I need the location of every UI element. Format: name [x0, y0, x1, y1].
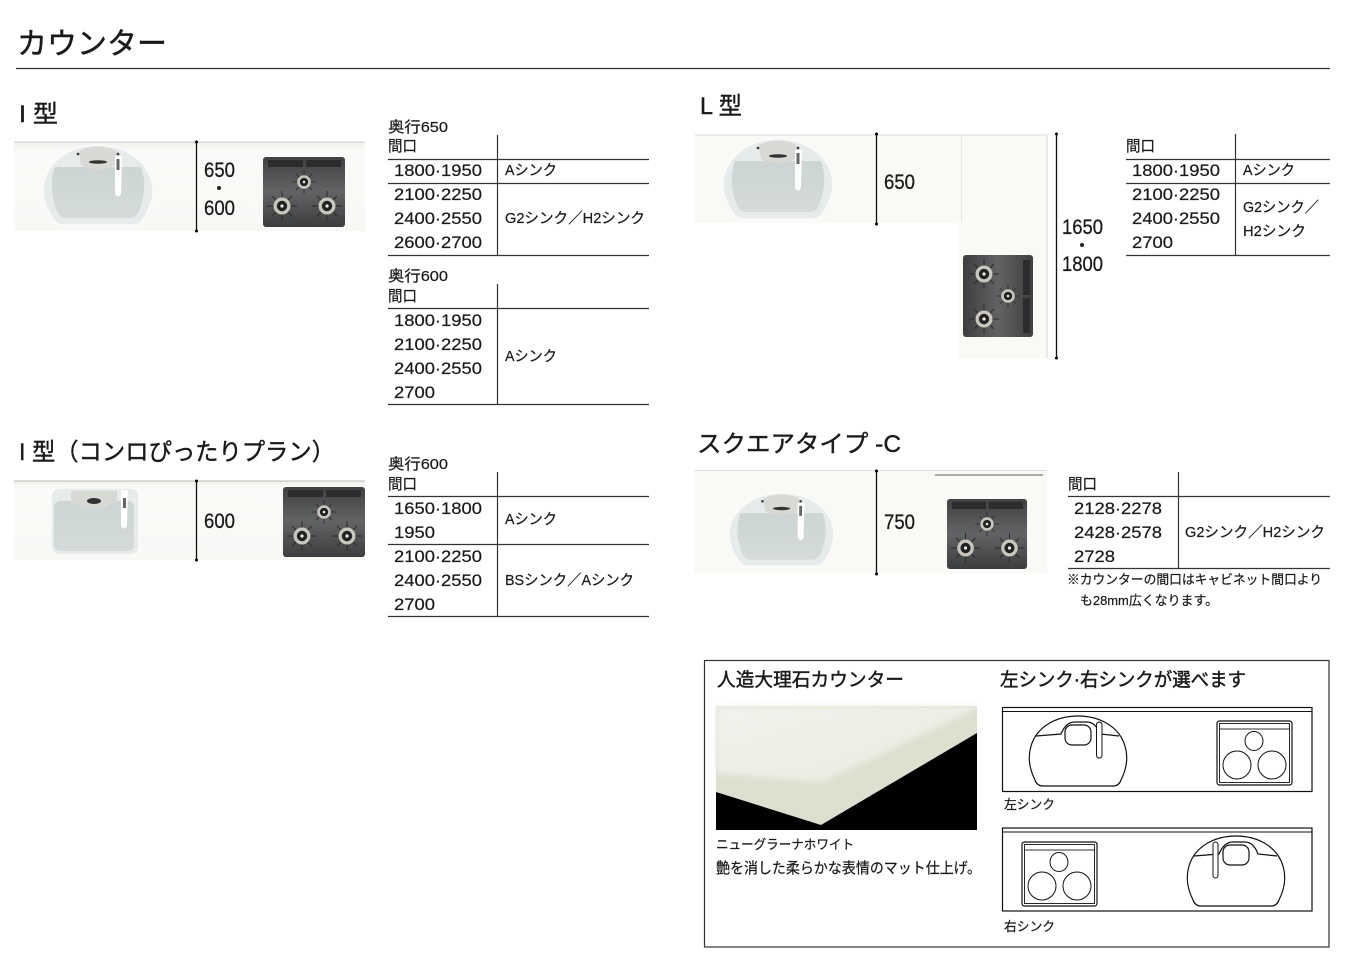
page title: カウンター	[17, 28, 167, 61]
table: 奥行650: G2シンク／H2シンク	[505, 210, 645, 227]
table: 奥行600: 2400·2550	[394, 359, 482, 378]
table: 奥行650: 奥行650	[388, 119, 448, 136]
material photo	[716, 706, 977, 830]
table: 奥行600 プラン: Aシンク	[505, 511, 557, 528]
dimension: 750: 750	[884, 511, 915, 534]
material caption: ニューグラーナホワイト	[716, 837, 854, 852]
table: 奥行600 プラン: 2700	[394, 595, 435, 614]
counter photo: I型	[14, 142, 365, 231]
table: 奥行600 プラン: 2100·2250	[394, 547, 482, 566]
table: 奥行600: 間口	[388, 288, 417, 305]
table: 奥行600: 2700	[394, 383, 435, 402]
table: 奥行650: 2100·2250	[394, 185, 482, 204]
table: 奥行600 プラン: 間口	[388, 476, 417, 493]
table: スクエア 間口	[1068, 472, 1330, 568]
table: L型 間口: 2400·2550	[1132, 209, 1220, 228]
dimension: 600	[195, 480, 235, 562]
counter photo: スクエアタイプ-C	[694, 470, 1047, 573]
table: L型 間口: Aシンク	[1243, 162, 1295, 179]
table: 奥行600: 奥行600	[388, 268, 448, 285]
table: 奥行650	[388, 119, 649, 256]
table: 奥行600: Aシンク	[505, 348, 557, 365]
table: 奥行600 プラン: 奥行600	[388, 456, 448, 473]
diagram: 右シンク	[1002, 828, 1312, 934]
diagram: 左シンク	[1002, 708, 1312, 812]
section: スクエアタイプ-C	[694, 431, 1330, 608]
table: スクエア 間口: 2128·2278	[1074, 499, 1162, 518]
footnote	[1067, 572, 1322, 608]
dimension: 1650・1800: 1800	[1062, 253, 1103, 276]
table: 奥行600 プラン	[388, 456, 649, 617]
table: 奥行600 プラン: 2400·2550	[394, 571, 482, 590]
table: 奥行650: 2600·2700	[394, 233, 482, 252]
table: L型 間口: G2シンク／	[1243, 199, 1319, 216]
table: 奥行600 プラン: BSシンク／Aシンク	[505, 572, 634, 589]
counter photo: L型	[695, 135, 1047, 358]
table: 奥行650: 1800·1950	[394, 161, 482, 180]
dimension: 600: 600	[204, 510, 235, 533]
material caption: 艶を消した柔らかな表情のマット仕上げ。	[716, 860, 981, 877]
panel: 人造大理石カウンター	[704, 660, 1329, 947]
footnote: も28mm広くなります。	[1080, 593, 1218, 608]
label: 左シンク: 左シンク	[1004, 797, 1055, 812]
dimension: 650・600: 600	[204, 197, 235, 220]
dimension: 650・600	[195, 140, 235, 232]
table: 奥行600: 2100·2250	[394, 335, 482, 354]
heading: I型（コンロぴったりプラン）: I 型（コンロぴったりプラン）	[19, 439, 335, 466]
heading: I型: I 型	[19, 101, 58, 128]
table: スクエア 間口: 2728	[1074, 547, 1115, 566]
dimension: 750	[875, 470, 915, 576]
heading: 左シンク・右シンク: 左シンク·右シンクが選べます	[1000, 669, 1246, 691]
label: 右シンク: 右シンク	[1004, 919, 1055, 934]
table: L型 間口: 間口	[1126, 138, 1155, 155]
dimension: 650・600: 650	[204, 159, 235, 182]
table: 奥行650: Aシンク	[505, 162, 557, 179]
table: 奥行600: 1800·1950	[394, 311, 482, 330]
table: スクエア 間口: G2シンク／H2シンク	[1185, 524, 1325, 541]
dimension: 650: 650	[884, 171, 915, 194]
section: L型	[695, 93, 1330, 360]
dimension: 1650・1800	[1055, 132, 1103, 360]
material caption	[716, 837, 981, 877]
heading: L型: L 型	[700, 93, 742, 120]
table: 奥行600 プラン: 1650·1800	[394, 499, 482, 518]
table: L型 間口: 2700	[1132, 233, 1173, 252]
table: L型 間口: 2100·2250	[1132, 185, 1220, 204]
dimension: 650	[875, 132, 915, 226]
dimension: 1650・1800: 1650	[1062, 216, 1103, 239]
section: I型	[14, 101, 649, 405]
table: L型 間口: 1800·1950	[1132, 161, 1220, 180]
table: L型 間口: H2シンク	[1243, 223, 1306, 240]
counter photo: コンロぴったりプラン	[14, 481, 365, 560]
table: 奥行650: 間口	[388, 138, 417, 155]
heading: スクエアタイプ-C: スクエアタイプ -C	[697, 431, 901, 458]
footnote: ※カウンターの間口はキャビネット間口より	[1067, 572, 1322, 587]
table: スクエア 間口: 2428·2578	[1074, 523, 1162, 542]
table: スクエア 間口: 間口	[1068, 476, 1097, 493]
section: I型 コンロぴったりプラン	[14, 439, 649, 617]
table: 奥行600	[388, 268, 649, 405]
heading: 人造大理石カウンター: 人造大理石カウンター	[717, 669, 904, 691]
table: L型 間口	[1126, 134, 1330, 256]
table: 奥行600 プラン: 1950	[394, 523, 435, 542]
table: 奥行650: 2400·2550	[394, 209, 482, 228]
